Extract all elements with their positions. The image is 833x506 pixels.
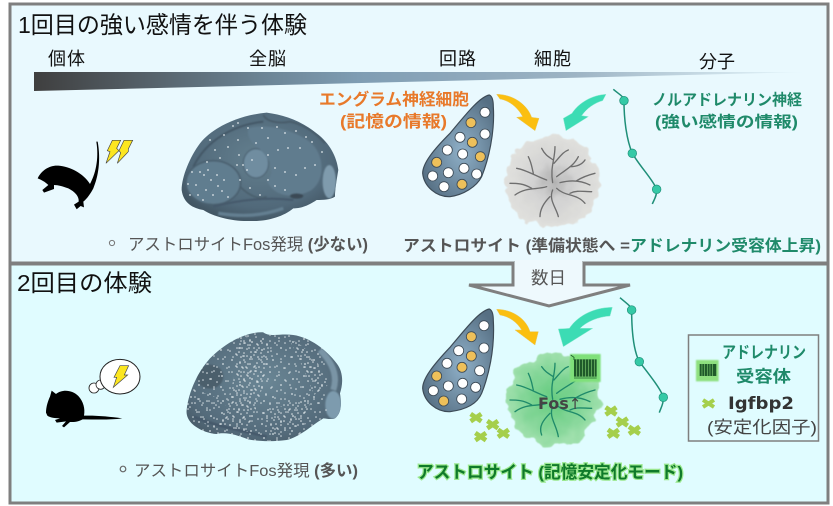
scale gradient bar [34,72,807,91]
legend icon: Igfbp2 [703,400,714,407]
Fos label: high: アストロサイトFos発現 (多い) [134,462,358,480]
icon: lightning bolts [106,140,133,163]
engram circuit: top [423,95,494,197]
legend label: Igfbp2 [707,394,817,437]
icon: rearing mouse with shock [38,140,133,209]
label: days: 数日 [531,268,566,288]
arrow: engram to astrocyte, top [497,94,539,131]
arrow: several days [469,260,630,306]
label: noradrenergic nerves: (強い感情の情報) [655,112,798,131]
legend label: adrenergic receptor: 受容体 [736,366,792,386]
stabilising factor Igfbp2 markers [471,407,640,440]
Fos label: low: アストロサイトFos発現 (少ない) [128,235,368,254]
engram circuit: bottom [423,309,494,412]
astrocyte: resting, grey [506,135,600,229]
legend label: adrenergic receptor: アドレナリン [722,344,806,362]
scale labels [48,49,735,72]
label: noradrenergic nerves: ノルアドレナリン神経 [652,91,802,109]
brain: few Fos cells [182,113,338,221]
icon: receptor on astrocyte [570,354,601,382]
label: noradrenergic nerves [652,91,802,131]
label: engram neurons: (記憶の情報) [340,112,447,131]
arrow: noradrenaline to astrocyte, top [563,94,606,131]
astrocyte: active, green [506,354,600,446]
label: astrocyte stabilisation mode: アストロサイト (記憶安定化モード) [417,463,683,482]
label: engram neurons [319,89,469,131]
scale labels: 細胞 [534,49,571,69]
arrow: engram to astrocyte, bottom [497,309,538,345]
label: astrocyte priming: アストロサイト (準備状態へ = アドレナリン受容体上昇) [403,236,821,255]
legend label: Igfbp2: (安定化因子) [707,418,817,437]
label: engram neurons: エングラム神経細胞 [319,89,469,109]
scale labels: 全脳 [249,49,286,69]
arrow: noradrenaline to astrocyte, bottom [558,307,612,347]
scale labels: 回路 [439,49,476,69]
scale labels: 個体 [48,49,85,69]
legend label: Igfbp2: Igfbp2 [728,394,794,414]
title: second experience: 2回目の体験 [17,270,152,296]
scale labels: 分子 [699,52,735,72]
label: Fos up: Fos↑ [538,394,581,413]
brain: many Fos cells [186,330,342,444]
legend icon: receptor [696,360,719,381]
legend [688,335,818,441]
icon: thought bubble [89,359,140,394]
noradrenergic axon: bottom [620,298,668,413]
icon: mouse recalling shock [46,359,140,427]
noradrenergic axon: top [613,89,661,204]
legend label: adrenergic receptor [722,344,806,386]
title: first experience: 1回目の強い感情を伴う体験 [18,12,307,38]
